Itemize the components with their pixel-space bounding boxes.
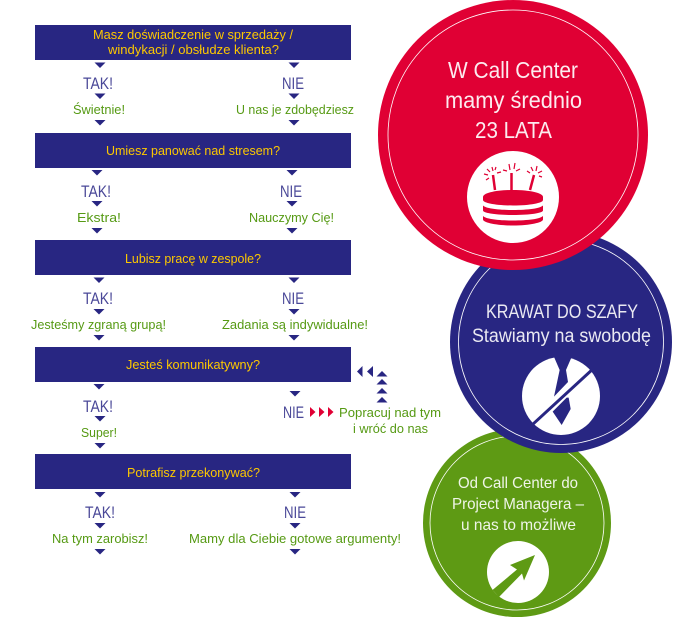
green circle text: u nas to możliwe [461,517,576,534]
panel: navy circle [450,231,672,453]
row 1 answers: U nas je zdobędziesz [236,102,354,117]
row 3 answers [31,278,368,340]
row 2 answers [77,170,334,234]
row 4 answers: NIE [283,403,304,422]
row 2 answers: Nauczymy Cię! [249,210,334,225]
return path: work on it and come back: Popracuj nad tym [339,405,441,420]
red circle text [445,57,582,143]
question box 3: Lubisz pracę w zespole? [125,251,261,266]
row 3 answers: TAK! [83,289,113,308]
panel: flowchart [31,25,441,554]
question box 2: Umiesz panować nad stresem? [106,143,280,158]
row 4 answers: Super! [81,425,117,440]
row 5 answers: Mamy dla Ciebie gotowe argumenty! [189,531,401,546]
question box 5 [35,454,351,489]
green circle text: Project Managera – [452,496,584,513]
return path: work on it and come back: i wróć do nas [353,421,428,436]
red circle text: mamy średnio [445,87,582,113]
question box 3 [35,240,351,275]
row 3 answers: NIE [282,289,304,308]
navy circle text [472,302,651,347]
panel: green circle [423,429,611,617]
question box 1: Masz doświadczenie w sprzedaży / [93,27,293,42]
row 1 answers [73,62,354,126]
row 2 answers: Ekstra! [77,210,121,225]
row 2 answers: NIE [280,182,302,201]
row 5 answers: TAK! [85,503,115,522]
green circle text: Od Call Center do [458,475,578,492]
row 3 answers: Zadania są indywidualne! [222,317,368,332]
row 5 answers: NIE [284,503,306,522]
panel: red circle [378,0,648,270]
navy circle text: KRAWAT DO SZAFY [486,302,638,323]
row 1 answers: Świetnie! [73,102,125,117]
row 4 answers [81,384,304,448]
question box 5: Potrafisz przekonywać? [127,465,260,480]
row 4 answers: TAK! [83,397,113,416]
green circle text [452,475,584,534]
question box 2 [35,133,351,168]
row 5 answers [52,492,401,554]
return path: work on it and come back [310,366,441,436]
red circle text: W Call Center [448,57,578,83]
icon: birthday cake [467,151,559,243]
row 1 answers: NIE [282,74,304,93]
row 3 answers: Jesteśmy zgraną grupą! [31,317,166,332]
row 2 answers: TAK! [81,182,111,201]
navy circle text: Stawiamy na swobodę [472,326,651,347]
icon: growth arrow [487,541,549,603]
icon: crossed-out tie [522,355,600,435]
red circle text: 23 LATA [475,117,553,143]
question box 1: windykacji / obsłudze klienta? [107,42,279,57]
question box 1 [35,25,351,60]
question box 4: Jesteś komunikatywny? [126,357,260,372]
question box 4 [35,347,351,382]
row 1 answers: TAK! [83,74,113,93]
row 5 answers: Na tym zarobisz! [52,531,148,546]
